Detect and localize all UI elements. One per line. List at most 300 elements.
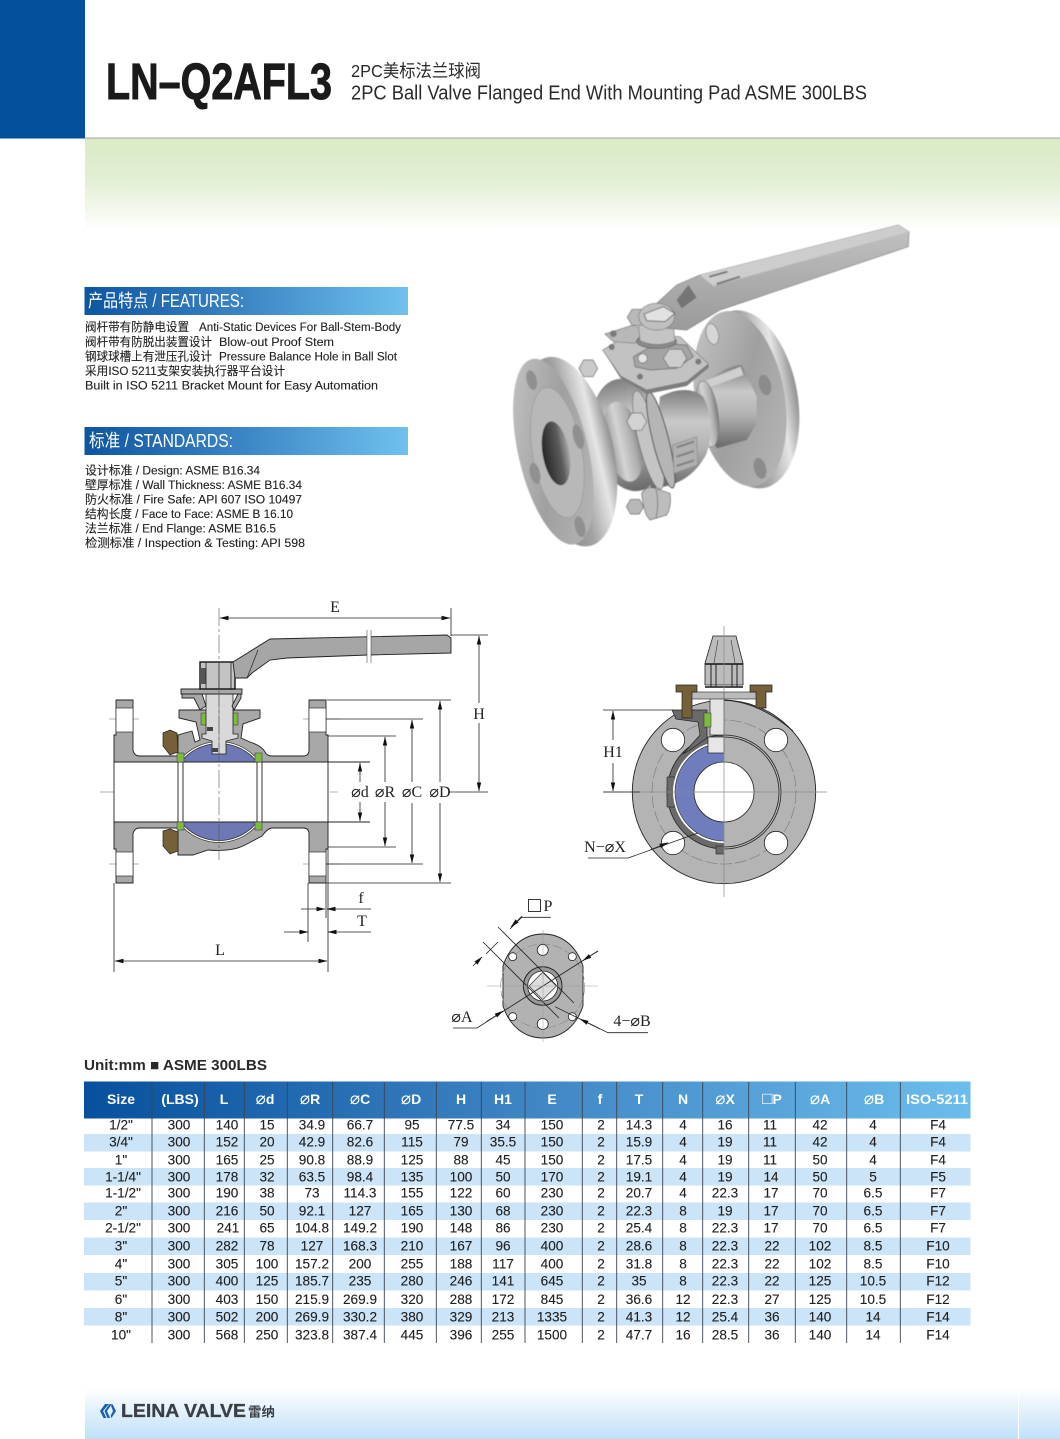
- features list: [85, 319, 402, 392]
- diagram: mounting pad view: [451, 898, 651, 1042]
- table rows: 172: [492, 1292, 514, 1307]
- table rows: 4: [869, 1118, 877, 1132]
- table rows: 22.3: [712, 1220, 738, 1236]
- features list: 采用ISO 5211支架安装执行器平台设计: [85, 363, 285, 378]
- panel: standards: [84, 427, 408, 550]
- table rows: 300: [168, 1238, 191, 1254]
- table rows: 10.5: [860, 1274, 886, 1288]
- features heading: 产品特点 / FEATURES:: [88, 291, 244, 311]
- name plate: [673, 437, 698, 473]
- table rows: 122: [450, 1186, 472, 1200]
- table rows: 135: [401, 1170, 423, 1184]
- labels: P: [544, 898, 553, 915]
- table header: H1: [494, 1091, 512, 1107]
- table rows: 50: [495, 1170, 511, 1184]
- standards list: 结构长度 / Face to Face: ASME B 16.10: [85, 506, 293, 521]
- table rows: 25.4: [712, 1310, 739, 1324]
- table rows: 2: [597, 1220, 605, 1236]
- table rows: 4: [679, 1152, 687, 1168]
- table rows: 190: [216, 1186, 239, 1200]
- table rows: 255: [401, 1256, 423, 1272]
- table header: (LBS): [161, 1091, 199, 1107]
- table rows: 82.6: [347, 1134, 373, 1150]
- table rows: 130: [450, 1204, 473, 1218]
- table rows: 22: [764, 1238, 780, 1254]
- lever handle: [627, 225, 909, 348]
- standards list: 防火标准 / Fire Safe: API 607 ISO 10497: [85, 492, 302, 506]
- dimension table: [84, 1082, 970, 1343]
- table rows: 15: [259, 1118, 275, 1132]
- column dividers: [152, 1082, 900, 1343]
- table rows: 4: [869, 1134, 877, 1150]
- table rows: 14: [763, 1170, 779, 1184]
- table rows: F4: [930, 1134, 946, 1150]
- table rows: 288: [450, 1292, 472, 1307]
- table rows: 1500: [537, 1328, 568, 1342]
- table header: Size: [107, 1091, 135, 1107]
- table rows: 19: [717, 1152, 733, 1168]
- table rows: 200: [256, 1310, 279, 1324]
- table rows: 63.5: [299, 1170, 325, 1184]
- table rows: 246: [450, 1274, 472, 1288]
- table rows: 1-1/4": [105, 1170, 141, 1184]
- table rows: 16: [717, 1118, 733, 1132]
- features list: Pressure Balance Hole in Ball Slot: [219, 350, 398, 364]
- standards list: 法兰标准 / End Flange: ASME B16.5: [85, 522, 276, 536]
- table rows: 241: [217, 1220, 239, 1236]
- table rows: 10": [111, 1328, 131, 1342]
- table caption: Unit:mm ■ ASME 300LBS: [84, 1057, 267, 1074]
- table rows: 22.3: [712, 1292, 738, 1307]
- table rows: 403: [216, 1292, 238, 1307]
- table rows: 11: [763, 1152, 777, 1168]
- table header: ⌀A: [810, 1089, 830, 1108]
- table rows: 88: [453, 1152, 469, 1168]
- features heading: [84, 287, 408, 315]
- dimension labels: L: [215, 942, 225, 959]
- stem and pad: [672, 692, 761, 754]
- table rows: 269.9: [343, 1292, 377, 1307]
- table rows: 178: [216, 1170, 238, 1184]
- table rows: 8.5: [864, 1238, 882, 1254]
- table rows: 90.8: [299, 1152, 325, 1168]
- table rows: 4: [869, 1152, 877, 1168]
- table rows: 79: [453, 1134, 469, 1150]
- table rows: 4": [115, 1256, 127, 1272]
- dimension labels: ⌀R: [375, 784, 395, 801]
- table rows: 845: [541, 1292, 563, 1307]
- table header: ⌀B: [864, 1089, 884, 1108]
- left flange: [498, 347, 634, 556]
- table rows: 11: [763, 1118, 777, 1132]
- table rows: 50: [812, 1170, 828, 1184]
- table rows: 8.5: [864, 1256, 882, 1272]
- table rows: 282: [216, 1238, 238, 1254]
- lever: [233, 630, 451, 678]
- table rows: 78: [259, 1238, 275, 1254]
- table header: T: [635, 1091, 644, 1107]
- table rows: 445: [401, 1328, 423, 1342]
- neck: [692, 365, 757, 448]
- dimension lines: [114, 608, 488, 972]
- table rows: 4: [679, 1186, 687, 1200]
- table rows: 104.8: [295, 1220, 329, 1236]
- table header: ⌀C: [350, 1089, 370, 1108]
- axis lines: [603, 626, 827, 897]
- mounting pad: [603, 325, 709, 394]
- table rows: 140: [216, 1118, 239, 1132]
- leaders: [453, 916, 648, 1042]
- table rows: F12: [926, 1274, 950, 1288]
- table rows: [105, 1118, 950, 1342]
- brown bolts: [163, 730, 178, 854]
- icon: Leina logo: [100, 1404, 116, 1418]
- table rows: 280: [401, 1274, 424, 1288]
- table rows: 3/4": [109, 1134, 133, 1150]
- labels: ⌀A: [451, 1009, 473, 1026]
- features list: 阀杆带有防静电设置: [85, 319, 189, 334]
- table rows: 300: [168, 1204, 191, 1218]
- center lines: [100, 719, 340, 864]
- table rows: 300: [168, 1256, 191, 1272]
- table rows: 17: [763, 1220, 779, 1236]
- table rows: 300: [168, 1274, 191, 1288]
- table rows: 502: [216, 1310, 238, 1324]
- table rows: 86: [495, 1220, 511, 1236]
- table header: ⌀R: [300, 1089, 320, 1108]
- table rows: 47.7: [626, 1328, 652, 1342]
- brown bolts: [676, 685, 772, 718]
- table rows: 60: [495, 1186, 511, 1200]
- table rows: 8: [679, 1274, 687, 1288]
- table header: ⌀X: [715, 1089, 735, 1108]
- table rows: 25.4: [626, 1220, 653, 1236]
- header band: [0, 0, 1060, 231]
- stem center line: [218, 608, 220, 860]
- table rows: F4: [930, 1118, 946, 1132]
- table rows: 8: [679, 1220, 687, 1236]
- table rows: 12: [675, 1292, 691, 1307]
- table rows: 2: [597, 1328, 605, 1342]
- table header: ⌀D: [401, 1089, 421, 1108]
- table rows: 2: [597, 1310, 605, 1324]
- table rows: F4: [930, 1152, 946, 1168]
- table rows: 148: [450, 1220, 472, 1236]
- dimension labels: ⌀D: [429, 784, 451, 801]
- table rows: 2: [597, 1256, 605, 1272]
- table rows: 102: [809, 1238, 831, 1254]
- table rows: 8: [679, 1256, 687, 1272]
- table rows: 22.3: [626, 1204, 652, 1218]
- table rows: 115: [401, 1134, 423, 1150]
- table rows: 14.3: [626, 1118, 652, 1132]
- table rows: 170: [541, 1170, 564, 1184]
- table rows: 28.5: [712, 1328, 738, 1342]
- table rows: 35.5: [490, 1134, 516, 1150]
- bolts and clamp lugs: [579, 360, 670, 520]
- table rows: 165: [401, 1204, 423, 1218]
- standards heading: 标准 / STANDARDS:: [89, 431, 233, 451]
- table rows: 36.6: [626, 1292, 652, 1307]
- features list: Anti-Static Devices For Ball-Stem-Body: [199, 320, 402, 334]
- table rows: 269.9: [295, 1310, 329, 1324]
- top nut: [705, 636, 743, 687]
- table rows: 320: [401, 1292, 424, 1307]
- ball: [114, 744, 370, 840]
- table rows: 300: [168, 1310, 191, 1324]
- table rows: 22.3: [712, 1274, 738, 1288]
- table rows: 2": [115, 1204, 127, 1218]
- table rows: 6.5: [864, 1186, 882, 1200]
- table header: ⌀d: [256, 1089, 274, 1108]
- features list: 钢球球槽上有泄压孔设计: [85, 350, 212, 364]
- table rows: 125: [809, 1292, 831, 1307]
- stem nut: [200, 662, 235, 689]
- table rows: 117: [492, 1256, 514, 1272]
- table header: □P: [762, 1089, 782, 1108]
- table rows: 127: [349, 1204, 371, 1218]
- table rows: 1/2": [109, 1118, 133, 1132]
- flange disc: [632, 700, 816, 884]
- features list: 阀杆带有防脱出装置设计: [85, 334, 212, 349]
- labels: [584, 744, 626, 856]
- table rows: F5: [930, 1170, 946, 1184]
- table rows: 65: [259, 1220, 275, 1236]
- table rows: 19: [717, 1134, 733, 1150]
- panel: features: [84, 287, 408, 392]
- table rows: 77.5: [448, 1118, 474, 1132]
- table rows: 323.8: [295, 1328, 329, 1342]
- title: model number: LN–Q2AFL3: [106, 53, 332, 110]
- table rows: 102: [809, 1256, 831, 1272]
- table rows: 165: [216, 1152, 238, 1168]
- stem: [202, 688, 238, 754]
- table rows: 125: [401, 1152, 423, 1168]
- table rows: 66.7: [347, 1118, 373, 1132]
- table rows: 150: [256, 1292, 279, 1307]
- table rows: 300: [168, 1152, 191, 1168]
- right flange: [681, 302, 813, 497]
- valve body section: [114, 700, 328, 883]
- table rows: 28.6: [626, 1238, 652, 1254]
- table rows: 35: [631, 1274, 647, 1288]
- table rows: 255: [492, 1328, 514, 1342]
- table rows: F7: [930, 1220, 946, 1236]
- table rows: 96: [495, 1238, 511, 1254]
- table rows: 95: [404, 1118, 420, 1132]
- table rows: 50: [259, 1204, 275, 1218]
- standards list: [85, 464, 305, 550]
- pad plate: [503, 934, 583, 1038]
- table rows: 140: [809, 1310, 832, 1324]
- table header: f: [598, 1091, 603, 1107]
- table rows: F10: [926, 1238, 950, 1254]
- alternating row stripes: [84, 1134, 970, 1326]
- table rows: F14: [926, 1310, 950, 1324]
- right half seat ring: [724, 700, 794, 850]
- brand name: 雷纳: [248, 1404, 275, 1420]
- dimension labels: ⌀d: [351, 784, 369, 801]
- table rows: 235: [349, 1274, 371, 1288]
- features list: Blow-out Proof Stem: [219, 335, 334, 349]
- dimension labels: ⌀C: [402, 784, 422, 801]
- diagram: side section view: [100, 599, 488, 972]
- table rows: 125: [256, 1274, 278, 1288]
- bore: [694, 762, 754, 822]
- bolt holes: [509, 944, 576, 1030]
- table rows: 8": [115, 1310, 127, 1324]
- table rows: F7: [930, 1186, 946, 1200]
- table rows: 210: [401, 1238, 424, 1254]
- standards list: 检测标准 / Inspection & Testing: API 598: [85, 535, 305, 550]
- subtitle: 2PC美标法兰球阀: [351, 61, 481, 81]
- table rows: 300: [168, 1118, 191, 1132]
- body: [582, 372, 711, 498]
- table rows: 300: [168, 1292, 191, 1307]
- table rows: 4: [679, 1118, 687, 1132]
- table rows: 230: [541, 1186, 564, 1200]
- dimension labels: [215, 599, 485, 959]
- table rows: 380: [401, 1310, 424, 1324]
- table rows: 200: [349, 1256, 372, 1272]
- brand name: LEINA VALVE: [121, 1401, 246, 1421]
- table header: ISO-5211: [906, 1091, 968, 1107]
- standards list: 设计标准 / Design: ASME B16.34: [85, 464, 260, 478]
- table rows: 215.9: [295, 1292, 329, 1307]
- blue corner block: [0, 0, 85, 138]
- table rows: 2: [597, 1118, 605, 1132]
- table rows: 20: [259, 1134, 275, 1150]
- table rows: 15.9: [626, 1134, 652, 1150]
- table rows: 22.3: [712, 1186, 738, 1200]
- table rows: 2: [597, 1274, 605, 1288]
- table rows: 32: [259, 1170, 275, 1184]
- table rows: 73: [304, 1186, 320, 1200]
- table rows: 329: [450, 1310, 472, 1324]
- bracket and stop: [181, 689, 242, 710]
- table rows: 92.1: [299, 1204, 325, 1218]
- table rows: 2: [597, 1186, 605, 1200]
- table rows: 152: [216, 1134, 238, 1150]
- table rows: 2: [597, 1204, 605, 1218]
- table rows: 114.3: [343, 1186, 377, 1200]
- table rows: 3": [115, 1238, 127, 1254]
- table rows: 6.5: [864, 1220, 882, 1236]
- green seats: [177, 713, 262, 830]
- table rows: F10: [926, 1256, 950, 1272]
- subtitle: [351, 61, 867, 104]
- table rows: 190: [401, 1220, 424, 1236]
- table rows: 17.5: [626, 1152, 652, 1168]
- labels: N−⌀X: [584, 839, 626, 856]
- table rows: 168.3: [343, 1238, 377, 1254]
- table rows: 20.7: [626, 1186, 652, 1200]
- table rows: 34.9: [299, 1118, 325, 1132]
- table rows: 1335: [537, 1310, 567, 1324]
- table rows: 25: [259, 1152, 275, 1168]
- table rows: F12: [926, 1292, 950, 1307]
- footer band: [85, 1388, 1060, 1439]
- table rows: 19: [717, 1170, 733, 1184]
- table rows: 300: [168, 1328, 191, 1342]
- table rows: 10.5: [860, 1292, 886, 1307]
- table rows: 2: [597, 1152, 605, 1168]
- table rows: 140: [809, 1328, 832, 1342]
- table rows: 22: [764, 1256, 780, 1272]
- table rows: 155: [401, 1186, 423, 1200]
- table rows: 216: [216, 1204, 238, 1218]
- table rows: 2-1/2": [105, 1220, 141, 1236]
- table rows: 230: [541, 1204, 564, 1218]
- features list: Built in ISO 5211 Bracket Mount for Easy Automation: [85, 378, 378, 392]
- table rows: 50: [812, 1152, 828, 1168]
- table rows: 149.2: [343, 1220, 377, 1236]
- table header: N: [678, 1091, 688, 1107]
- dimension labels: H: [473, 706, 485, 723]
- table rows: 68: [495, 1204, 511, 1218]
- table header: L: [220, 1091, 229, 1107]
- table rows: 14: [865, 1328, 881, 1342]
- table rows: 300: [168, 1134, 191, 1150]
- table rows: 125: [809, 1274, 831, 1288]
- table rows: 400: [541, 1256, 564, 1272]
- table rows: 2: [597, 1170, 605, 1184]
- stem bore: [523, 967, 562, 1005]
- table rows: 17: [763, 1186, 779, 1200]
- table rows: 305: [216, 1256, 238, 1272]
- subtitle: 2PC Ball Valve Flanged End With Mounting Pad ASME 300LBS: [351, 82, 867, 104]
- table rows: 19.1: [626, 1170, 652, 1184]
- table rows: 6.5: [864, 1204, 882, 1218]
- table rows: 42.9: [299, 1134, 325, 1150]
- labels: 4−⌀B: [613, 1013, 651, 1030]
- dimension labels: E: [330, 599, 340, 616]
- table rows: 8: [679, 1204, 687, 1218]
- table rows: 12: [675, 1310, 691, 1324]
- table rows: 2: [597, 1238, 605, 1254]
- table rows: 5: [869, 1170, 877, 1184]
- table rows: 100: [450, 1170, 473, 1184]
- table rows: 300: [168, 1186, 191, 1200]
- dimension labels: T: [357, 913, 367, 930]
- table rows: 4: [679, 1170, 687, 1184]
- table rows: 36: [764, 1328, 780, 1342]
- table rows: 150: [541, 1152, 564, 1168]
- table rows: 4: [679, 1134, 687, 1150]
- table rows: F7: [930, 1204, 946, 1218]
- table rows: 185.7: [295, 1274, 329, 1288]
- table rows: 45: [495, 1152, 511, 1168]
- table rows: 27: [764, 1292, 780, 1307]
- diagram: end section view: [584, 626, 827, 897]
- table rows: 100: [256, 1256, 279, 1272]
- table rows: 230: [541, 1220, 564, 1236]
- table rows: 2: [597, 1292, 605, 1307]
- table rows: 22.3: [712, 1238, 738, 1254]
- labels: H1: [603, 744, 623, 761]
- table rows: F14: [926, 1328, 950, 1342]
- H1 dimension: [588, 710, 698, 858]
- table rows: 11: [763, 1134, 777, 1150]
- table rows: 127: [301, 1238, 323, 1254]
- table rows: 98.4: [347, 1170, 374, 1184]
- table rows: 150: [541, 1134, 564, 1150]
- table rows: 396: [450, 1328, 472, 1342]
- table rows: 150: [541, 1118, 564, 1132]
- table rows: 31.8: [626, 1256, 652, 1272]
- table rows: 6": [115, 1292, 127, 1307]
- table rows: 34: [495, 1118, 511, 1132]
